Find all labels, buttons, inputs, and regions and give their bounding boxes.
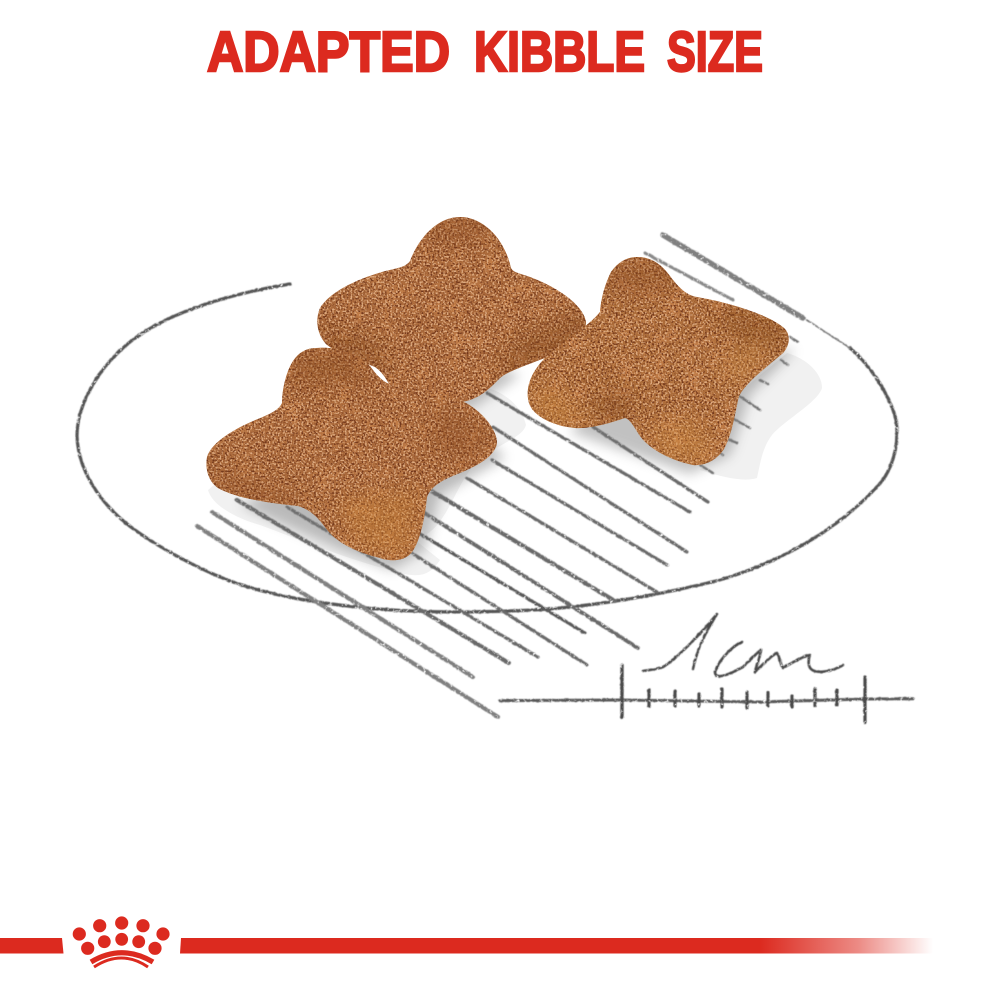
kibble: front bbox=[205, 348, 497, 560]
title: SIZE bbox=[667, 20, 763, 84]
light shadow patches on the plate bbox=[208, 353, 822, 575]
ruler small ticks bbox=[649, 689, 837, 708]
shading and warm glow bbox=[605, 262, 680, 295]
title: ADAPTED bbox=[207, 20, 450, 84]
icon: crown logo bbox=[73, 916, 170, 967]
plate and hatching pencil sketch bbox=[77, 235, 897, 717]
ruler axis bbox=[500, 699, 913, 702]
handwritten 1cm bbox=[643, 614, 717, 671]
plate thin segment bbox=[807, 320, 850, 348]
footer bar: right fading segment bbox=[180, 938, 933, 954]
title bbox=[207, 20, 763, 84]
title: KIBBLE bbox=[474, 20, 645, 84]
back hatch thick bbox=[663, 235, 803, 318]
short marks right bbox=[700, 337, 798, 473]
shading on lower lobes and crease bbox=[318, 330, 388, 380]
1 cm scale sketch bbox=[500, 614, 913, 722]
kibble shadows bbox=[240, 350, 795, 570]
hatch lines bbox=[197, 393, 708, 717]
back hatch second bbox=[645, 253, 733, 300]
footer bar: left segment bbox=[0, 938, 64, 954]
shading and warm glow bbox=[290, 350, 370, 385]
kibble: right bbox=[528, 257, 790, 465]
plate outline bbox=[77, 284, 897, 612]
kibble: back bbox=[317, 215, 590, 402]
ruler end ticks bbox=[620, 665, 624, 717]
